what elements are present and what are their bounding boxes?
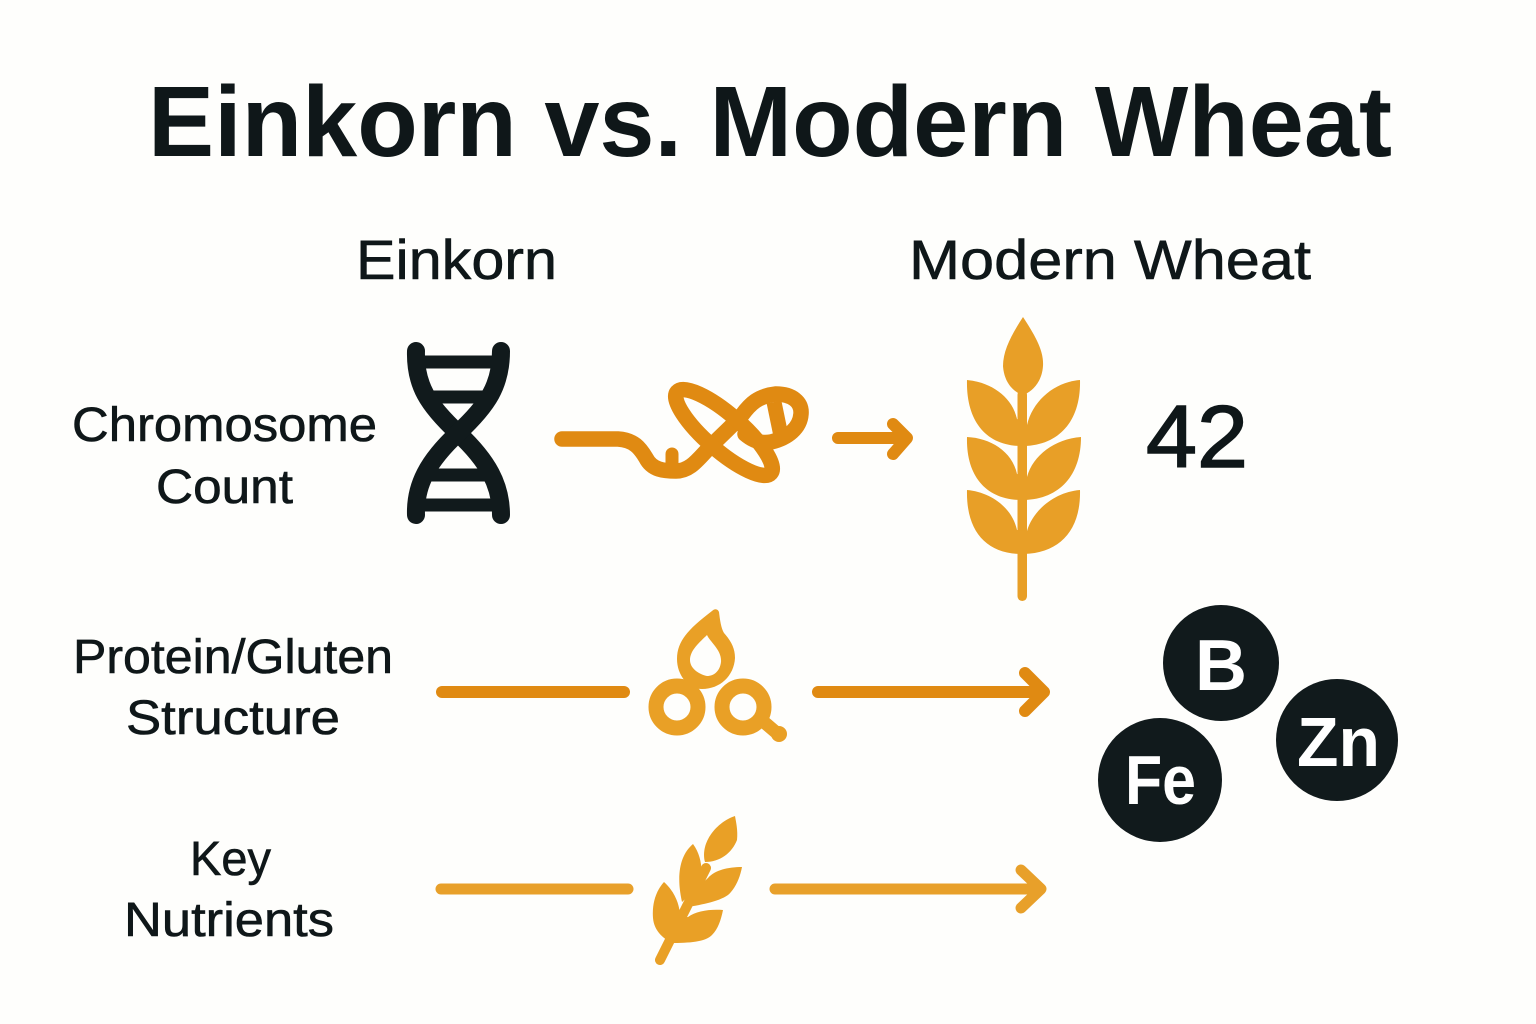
arrow: protein line left <box>442 686 624 698</box>
arrow: nutrients line left <box>441 884 628 894</box>
arrow: chromosome count <box>838 424 907 454</box>
column headings <box>356 228 1311 291</box>
icon: tangled chromosome strand <box>562 378 907 487</box>
badge: zinc: Zn <box>1297 703 1380 781</box>
icon: gluten rings <box>656 609 787 742</box>
badge: boron: B <box>1195 626 1247 706</box>
icon: einkorn sprig <box>653 816 742 960</box>
badge: boron <box>1163 605 1279 721</box>
heading: Modern Wheat: Modern Wheat <box>909 228 1311 291</box>
label: protein/gluten structure: Protein/Gluten <box>73 631 393 684</box>
heading: Einkorn: Einkorn <box>356 228 557 291</box>
row: chromosome count <box>72 317 1248 601</box>
badge: iron: Fe <box>1125 741 1196 819</box>
icon: modern wheat ear <box>967 317 1081 601</box>
row: key nutrients <box>124 816 1041 960</box>
row: protein and gluten structure <box>73 609 1044 745</box>
badge: iron <box>1098 718 1222 842</box>
badge: zinc <box>1276 679 1398 801</box>
label: protein/gluten structure <box>73 631 393 745</box>
label: chromosome count <box>72 399 377 514</box>
label: chromosome count: Count <box>156 461 293 514</box>
title: Einkorn vs. Modern Wheat <box>148 66 1392 178</box>
label: key nutrients <box>124 833 334 947</box>
label: key nutrients: Nutrients <box>124 894 334 947</box>
label: key nutrients: Key <box>190 833 271 886</box>
arrow: protein line right <box>818 673 1044 711</box>
icon: DNA helix <box>416 351 501 515</box>
nutrient badges <box>1098 605 1398 842</box>
label: chromosome count: Chromosome <box>72 399 377 452</box>
value: 42 chromosomes: 42 <box>1146 387 1248 486</box>
arrow: nutrients line right <box>775 870 1041 908</box>
label: protein/gluten structure: Structure <box>126 692 340 745</box>
